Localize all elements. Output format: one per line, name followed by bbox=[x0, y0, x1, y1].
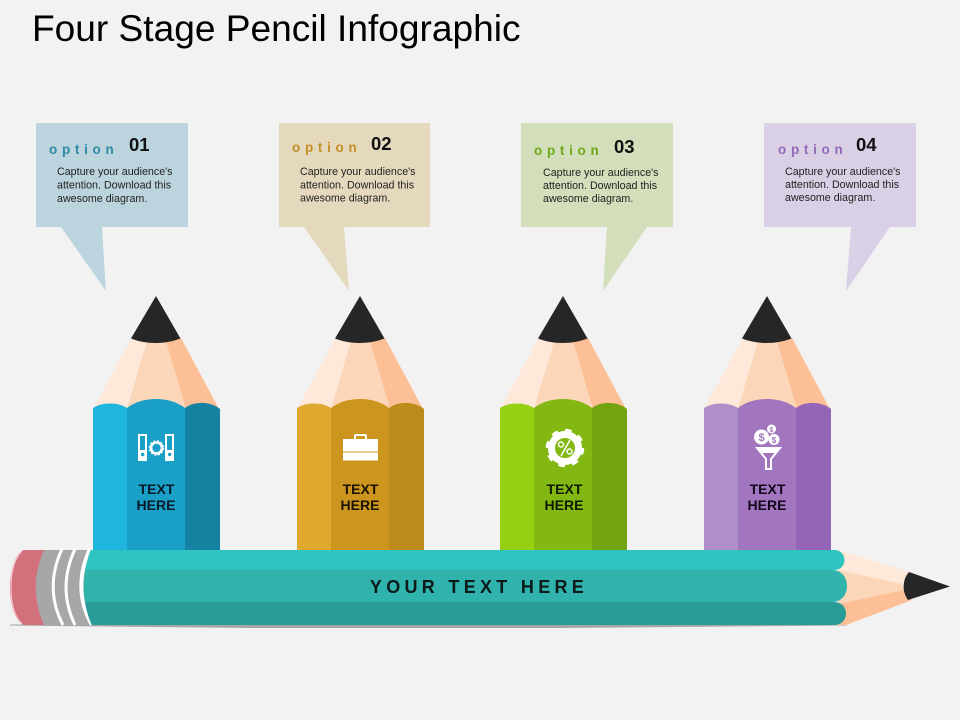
pencil 4 label: HERE bbox=[748, 497, 786, 513]
pencil lead bbox=[904, 572, 950, 600]
pencil 3 label: TEXT bbox=[547, 481, 583, 497]
pencil wood point bbox=[838, 550, 912, 625]
pencil 1 label: TEXT bbox=[139, 481, 175, 497]
callout: option 03: Capture your audience's bbox=[543, 167, 659, 179]
callout: option 04: attention. Download this bbox=[785, 179, 899, 191]
callout: option 01: option bbox=[49, 142, 118, 157]
callout: option 03: attention. Download this bbox=[543, 180, 657, 192]
callout: option 02: Capture your audience's bbox=[300, 166, 416, 178]
callout: option 03: option bbox=[534, 143, 603, 158]
title: Four Stage Pencil Infographic bbox=[32, 7, 520, 49]
icon: gear with percent bbox=[548, 430, 582, 466]
callout: option 04: 04 bbox=[856, 134, 877, 155]
icon: funnel with coins: $ bbox=[770, 427, 774, 434]
pencil 3 (green) bbox=[500, 296, 627, 551]
pencil 3 label: HERE bbox=[545, 497, 583, 513]
callout: option 03: awesome diagram. bbox=[543, 193, 633, 205]
pencil 2 label: HERE bbox=[341, 497, 379, 513]
pencil 4 (purple) bbox=[704, 296, 831, 551]
pencil 2 (amber) bbox=[297, 296, 424, 551]
callout: option 04: option bbox=[778, 142, 847, 157]
pencil 1 (blue) bbox=[93, 296, 220, 551]
callout: option 03: 03 bbox=[614, 136, 635, 157]
callout: option 01: Capture your audience's bbox=[57, 166, 173, 178]
icon: briefcase bbox=[343, 434, 378, 460]
callout: option 04 bbox=[764, 123, 916, 291]
callout: option 01: attention. Download this bbox=[57, 180, 171, 192]
callout: option 04: awesome diagram. bbox=[785, 192, 875, 204]
shadow bbox=[10, 624, 847, 628]
callout: option 02: awesome diagram. bbox=[300, 192, 390, 204]
eraser bbox=[10, 550, 46, 625]
callout: option 01: 01 bbox=[129, 134, 150, 155]
icon: funnel with coins: $ bbox=[758, 432, 765, 444]
icon: funnel with coins bbox=[754, 424, 780, 469]
callout: option 04: Capture your audience's bbox=[785, 166, 901, 178]
horizontal pencil bbox=[10, 549, 950, 628]
barrel label: YOUR TEXT HERE bbox=[370, 577, 588, 597]
icon: binders and gear bbox=[138, 434, 174, 461]
callout: option 02: option bbox=[292, 140, 361, 155]
callout: option 02: 02 bbox=[371, 133, 392, 154]
pencil 4 label: TEXT bbox=[750, 481, 786, 497]
callout: option 02 bbox=[279, 123, 430, 291]
icon: funnel with coins: $ bbox=[772, 436, 777, 445]
metal ferrule bbox=[36, 549, 92, 625]
callout: option 03 bbox=[521, 123, 673, 291]
callout: option 02: attention. Download this bbox=[300, 180, 414, 192]
callout: option 01 bbox=[36, 123, 188, 291]
pencil 2 label: TEXT bbox=[343, 481, 379, 497]
callout: option 01: awesome diagram. bbox=[57, 193, 147, 205]
pencil 1 label: HERE bbox=[137, 497, 175, 513]
pencil barrel bbox=[80, 550, 847, 625]
